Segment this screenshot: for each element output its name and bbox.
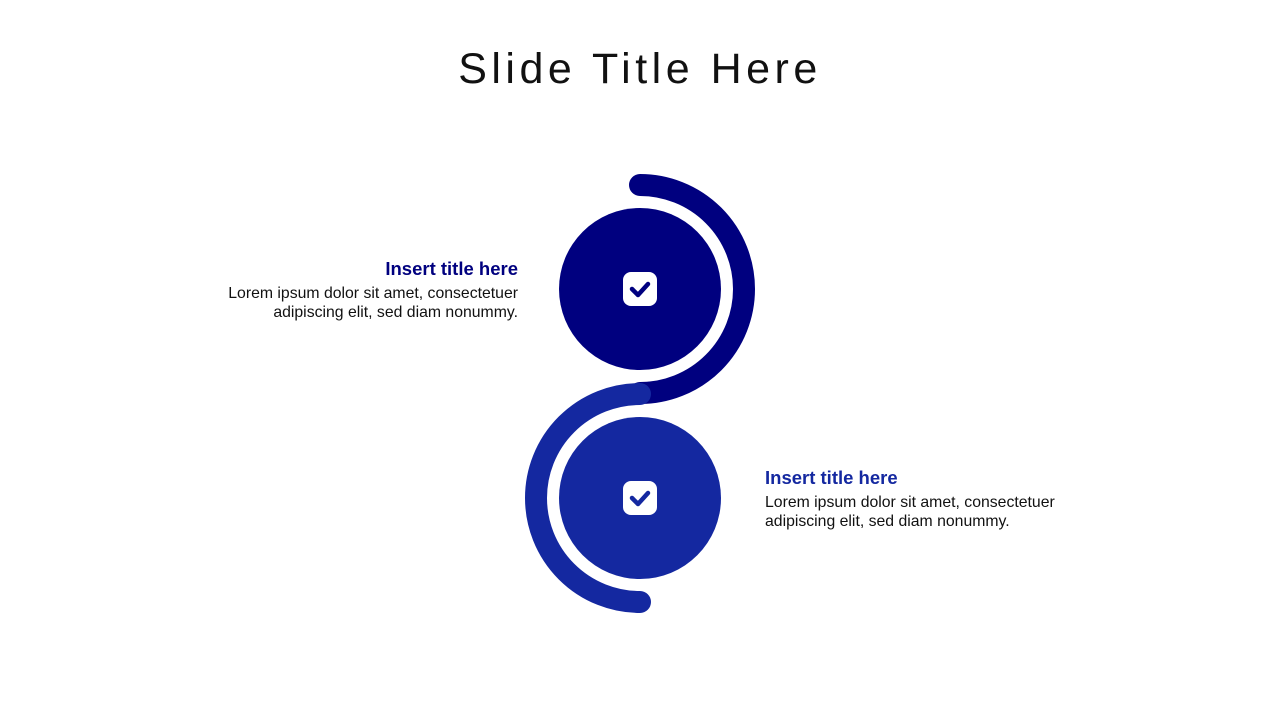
- heading left: Insert title here: [385, 258, 518, 279]
- circle: bottom: [559, 417, 721, 579]
- body right: [765, 494, 1055, 530]
- icon: check top: [623, 272, 657, 306]
- body right: Lorem ipsum dolor sit amet, consectetuer: [765, 494, 1055, 511]
- text block: left: [228, 258, 518, 321]
- body right: adipiscing elit, sed diam nonummy.: [765, 513, 1010, 530]
- body left: adipiscing elit, sed diam nonummy.: [273, 304, 518, 321]
- icon: check bottom: [623, 481, 657, 515]
- title: Slide Title Here: [458, 45, 822, 93]
- arc: bottom: [536, 394, 640, 602]
- heading right: Insert title here: [765, 467, 898, 488]
- body left: [228, 285, 518, 321]
- arc: top: [640, 185, 744, 393]
- body left: Lorem ipsum dolor sit amet, consectetuer: [228, 285, 518, 302]
- text block: right: [765, 467, 1055, 530]
- circle: top: [559, 208, 721, 370]
